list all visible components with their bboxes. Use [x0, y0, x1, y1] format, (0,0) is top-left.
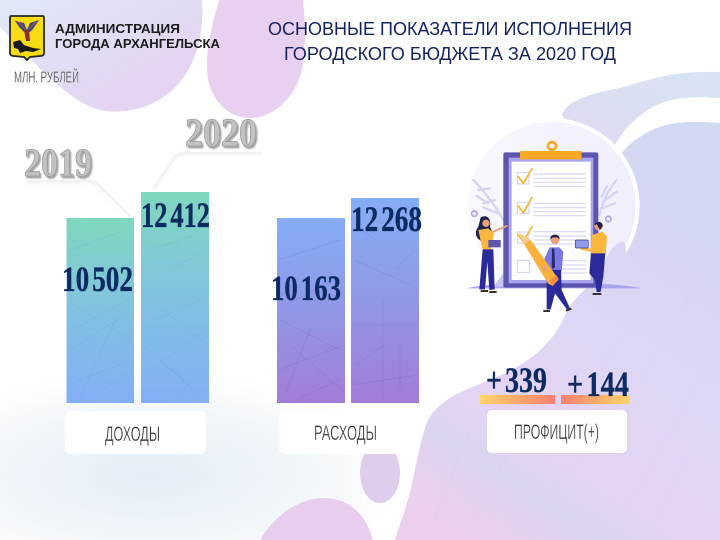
check marks: [518, 169, 532, 242]
bar: income 2020: [141, 192, 209, 403]
connector: 2020 label to bar: [154, 153, 262, 188]
value: +144: + 144: [567, 364, 629, 404]
year label 2019: 2019: [24, 140, 92, 185]
illustration: people with checklist clipboard: [466, 120, 642, 311]
label box: surplus: [487, 410, 627, 453]
icon: coat of arms shield: [10, 16, 44, 60]
label box: income: [65, 411, 206, 454]
highlight bar 2020: [561, 395, 630, 404]
title: ГОРОДСКОГО БЮДЖЕТА ЗА 2020 ГОД: [284, 44, 616, 64]
logo: coat of arms and administration name: [10, 16, 220, 60]
year label 2020: 2020: [185, 110, 257, 155]
right man figure: [575, 222, 607, 294]
clipboard: [503, 142, 598, 288]
value: +339: + 339: [486, 360, 547, 400]
checkboxes: [517, 173, 530, 272]
value: 12 268: 12 268: [351, 199, 422, 239]
decorative rings: [472, 211, 611, 222]
bar: expenses 2019: [277, 218, 345, 403]
bar chart: expenses: [271, 198, 422, 403]
surplus values: [480, 360, 630, 404]
checklist lines: [533, 174, 586, 273]
value: 10 163: 10 163: [271, 268, 341, 308]
bushes: [603, 242, 637, 285]
label box: expenses: РАСХОДЫ: [314, 422, 377, 445]
illustration background circle: [466, 120, 638, 287]
ground shadow: [467, 283, 642, 288]
title: ОСНОВНЫЕ ПОКАЗАТЕЛИ ИСПОЛНЕНИЯ: [268, 19, 632, 39]
label box: expenses: [279, 411, 419, 454]
bar chart: income: [62, 192, 210, 403]
leaves: [473, 180, 617, 220]
woman figure: [476, 216, 507, 292]
connector: 2019 label to bar: [26, 181, 130, 216]
title: [268, 19, 632, 64]
value: 10 502: 10 502: [62, 259, 133, 299]
bar: expenses 2020: [351, 198, 419, 403]
center man with pencil: [519, 233, 571, 311]
bar: income 2019: [66, 218, 134, 403]
circle outline: [466, 120, 638, 287]
highlight bar 2019: [480, 395, 555, 404]
label box: surplus: ПРОФИЦИТ(+): [514, 421, 599, 444]
organisation name: АДМИНИСТРАЦИЯ: [55, 22, 180, 36]
value: 12 412: 12 412: [141, 195, 210, 235]
unit label: МЛН. РУБЛЕЙ: [14, 68, 79, 86]
label box: income: ДОХОДЫ: [105, 423, 160, 446]
organisation name: ГОРОДА АРХАНГЕЛЬСКА: [55, 37, 220, 51]
organisation name: [55, 22, 220, 51]
